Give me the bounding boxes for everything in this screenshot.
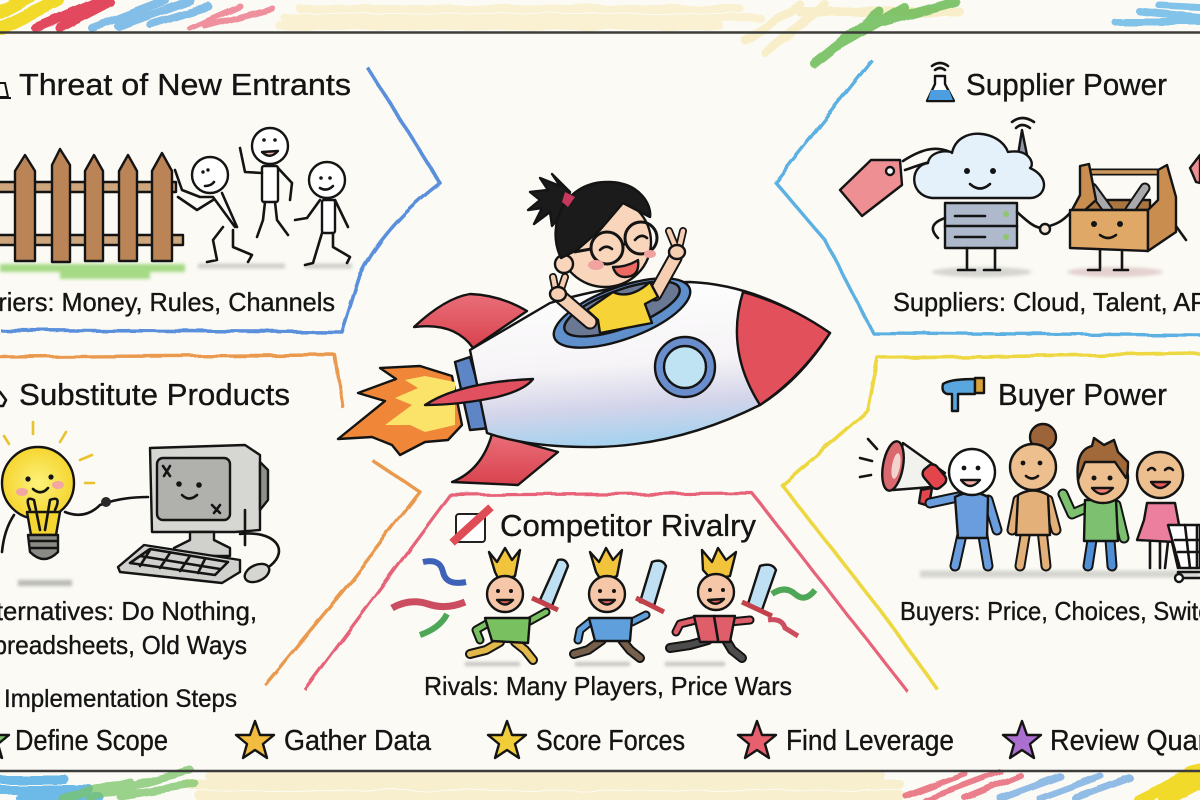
- panel: buyer power: [782, 354, 1200, 690]
- nose cone: [737, 292, 830, 405]
- step 2: gather data: [236, 721, 432, 758]
- side fin: [425, 379, 533, 405]
- toolbox: [1086, 200, 1150, 210]
- heading: threat of new entrants: Threat of New Entrants: [19, 67, 351, 102]
- step 2: gather data: Gather Data: [284, 725, 432, 757]
- step 5: review quarterly: [1003, 721, 1200, 758]
- yellow shirt: [587, 282, 658, 333]
- heading: substitute products: Substitute Products: [19, 377, 290, 412]
- engine ring: [455, 357, 490, 430]
- illustration: crowned rivals with swords: [392, 548, 815, 664]
- rival: green: [470, 548, 568, 660]
- illustration: cloud server and toolbox: [840, 118, 1200, 277]
- sky blue panel outline: [775, 60, 1200, 335]
- smile: [613, 260, 638, 277]
- panel: substitute products: [0, 355, 420, 685]
- heading: buyer power: Buyer Power: [998, 377, 1167, 412]
- head: [559, 197, 651, 287]
- rival: blue: [574, 548, 666, 658]
- panel: supplier power: [775, 60, 1200, 335]
- buyer: pink with cart: [1137, 503, 1180, 542]
- child astronaut: [528, 174, 685, 333]
- bottom crayon border: [0, 770, 1200, 800]
- hair: [556, 182, 650, 258]
- lower fin: [452, 434, 558, 485]
- arms: [562, 258, 675, 322]
- flame: [338, 366, 462, 455]
- cockpit: [545, 264, 699, 362]
- heading: competitor rivalry: Competitor Rivalry: [500, 508, 756, 543]
- rival: red suit: [670, 548, 776, 658]
- step 3: score forces: [488, 721, 685, 758]
- icon: flask with signal: [927, 63, 954, 101]
- caption: rivals: Rivals: Many Players, Price Wars: [424, 671, 792, 701]
- heading: implementation steps: Implementation Steps: [4, 685, 237, 713]
- victory hands: [553, 231, 683, 292]
- step 3: score forces: Score Forces: [536, 725, 685, 757]
- orange panel outline: [0, 355, 420, 685]
- step 4: find leverage: [738, 721, 954, 758]
- rocket body: [470, 282, 830, 447]
- panel: threat of new entrants: [0, 67, 440, 332]
- illustration: fence and stick figures: [0, 128, 352, 275]
- red trapezoid outline: [305, 493, 908, 692]
- upper fin: [414, 294, 527, 348]
- panel: competitor rivalry: [305, 493, 908, 701]
- implementation steps: [0, 685, 1200, 758]
- icon: crossed checkbox: [455, 510, 488, 542]
- heading: supplier power: Supplier Power: [966, 67, 1167, 102]
- blue panel outline: [0, 68, 440, 332]
- illustration: light bulb and old computer: [2, 422, 279, 586]
- step 4: find leverage: Find Leverage: [786, 725, 954, 757]
- top crayon border: [0, 0, 1200, 64]
- buyer: blue: [930, 497, 997, 566]
- porthole: [655, 337, 715, 397]
- icon: blue megaphone: [942, 378, 984, 411]
- glasses: [574, 222, 657, 264]
- figure walking: [309, 162, 345, 198]
- step 1: define scope: Define Scope: [15, 725, 168, 757]
- figure pushing: [192, 157, 228, 193]
- ponytail: [528, 174, 570, 226]
- megaphone: [893, 443, 945, 490]
- figure jumping: [252, 128, 288, 164]
- central rocket with child: [338, 174, 830, 485]
- buyer: green: [1063, 494, 1124, 566]
- icon: threat: [0, 83, 11, 98]
- icon: substitute: [0, 392, 6, 406]
- illustration: buyers with megaphone and cart: [860, 424, 1200, 582]
- buyer: tan: [1012, 500, 1056, 566]
- yellow panel outline: [782, 354, 1200, 690]
